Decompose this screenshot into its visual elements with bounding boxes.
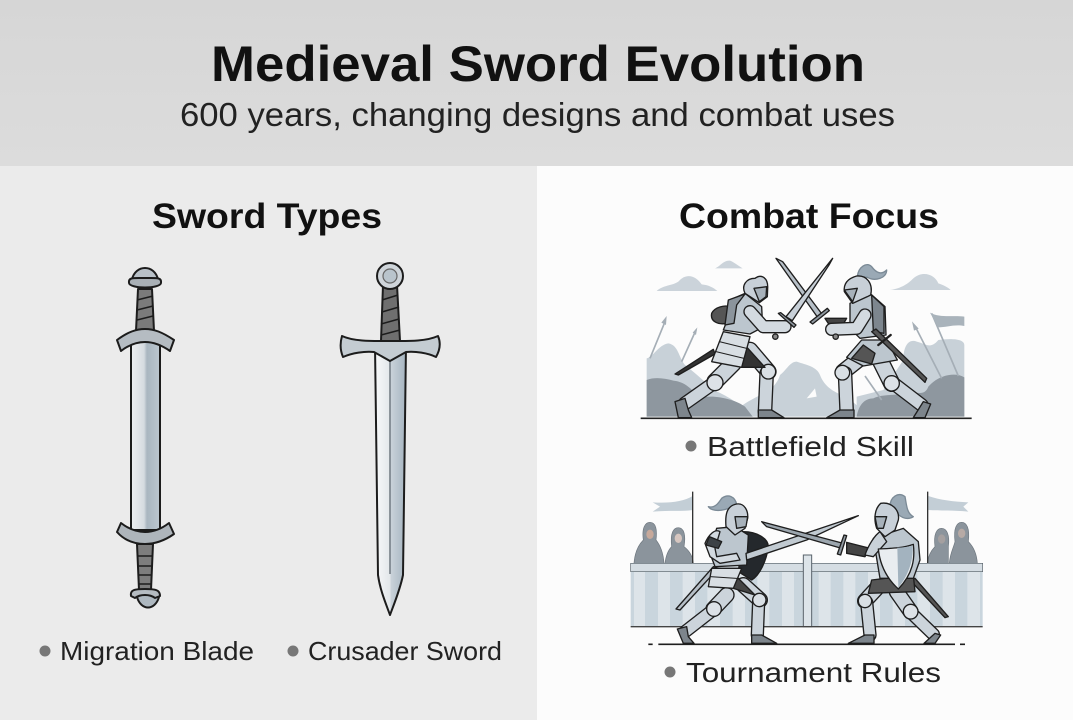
panel: combat focus — [537, 166, 1073, 720]
heading: combat focus: Combat Focus — [679, 197, 939, 236]
spectators — [634, 522, 977, 563]
icon: migration blade sword — [117, 268, 174, 608]
knight: right fighter — [825, 265, 931, 418]
illustration: tournament duel — [631, 492, 983, 644]
label: crusader sword: Crusader Sword — [308, 636, 502, 666]
knight: tournament right — [762, 495, 948, 643]
fence — [631, 555, 983, 627]
label: migration blade: Migration Blade — [60, 636, 254, 666]
label: battlefield skill: Battlefield Skill — [707, 431, 914, 462]
illustration: battlefield duel — [641, 258, 972, 418]
swords crossed — [776, 258, 833, 327]
knight: left fighter — [675, 276, 785, 418]
label: tournament rules: Tournament Rules — [686, 657, 941, 688]
title: Medieval Sword Evolution — [211, 36, 865, 92]
panel: sword types — [0, 166, 537, 720]
icon: crusader sword — [341, 263, 440, 615]
knight: tournament left — [676, 496, 858, 643]
heading: sword types: Sword Types — [152, 197, 382, 236]
subtitle: 600 years, changing designs and combat uses — [180, 96, 895, 133]
panel: header band — [0, 0, 1073, 166]
